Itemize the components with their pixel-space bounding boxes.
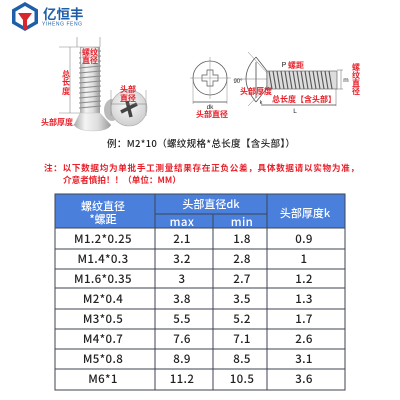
label: head diameter: 直径 (120, 93, 136, 104)
red notice: 注：以下数据均为单批手工测量结果存在正负公差，具体数据请以实物为准， (44, 162, 359, 174)
header: thread diameter and pitch (81, 198, 125, 227)
label: total length: 总 (62, 69, 70, 80)
dk dimension (193, 101, 227, 103)
row: M5 (83, 351, 313, 367)
icon: hexagon screw emblem (12, 2, 38, 31)
screw shaft with threads (79, 47, 101, 115)
header: head diameter dk: 头部直径dk (182, 196, 240, 212)
technical drawing: top view (190, 57, 231, 120)
table header background (55, 194, 345, 228)
row: M2: 1.3 (295, 291, 313, 307)
row: M1.2: 1.8 (233, 231, 251, 247)
row: M1.4: 1 (301, 251, 307, 267)
row: M5: M5*0.8 (83, 351, 123, 367)
header: thread diameter and pitch: 螺纹直径 (81, 198, 125, 214)
red notice (44, 162, 359, 186)
row: M1.6: 2.7 (233, 271, 251, 287)
example caption: 例：M2*10（螺纹规格*总长度【含头部】） (107, 136, 295, 150)
row: M3: 5.2 (233, 311, 251, 327)
screw head top view (104, 90, 147, 126)
row: M1.6: 1.2 (295, 271, 313, 287)
technical drawing: side view (233, 52, 360, 115)
row: M5: 8.9 (173, 351, 191, 367)
label: thread diameter: 直径 (82, 55, 98, 66)
threaded shaft (267, 71, 337, 89)
row: M6: 11.2 (170, 371, 194, 387)
screw head (74, 113, 111, 131)
L label: L (293, 108, 297, 115)
label: thread diameter vertical: 直 (352, 78, 360, 89)
row: M5: 8.5 (233, 351, 251, 367)
specification table (55, 194, 345, 390)
row: M3: 1.7 (295, 311, 313, 327)
row: M1.2: 0.9 (295, 231, 313, 247)
row: M4: M4*0.7 (83, 331, 123, 347)
label: head diameter: 头部 (120, 84, 136, 95)
row: M3: 5.5 (173, 311, 191, 327)
red notice: 介意者慎拍！！（单位：MM） (63, 174, 181, 186)
row: M3: M3*0.5 (83, 311, 123, 327)
row: M1.2: M1.2*0.25 (74, 231, 132, 247)
row: M4: 2.6 (295, 331, 313, 347)
90 degree label: 90° (233, 79, 243, 85)
photo: screw with dimension labels (41, 37, 147, 131)
label: thread diameter: 螺纹 (82, 47, 98, 58)
label: total length: 长 (62, 77, 70, 88)
row: M1.6 (74, 271, 313, 287)
label: head thickness: 头部厚度 (41, 117, 73, 128)
row: M1.2: 2.1 (173, 231, 191, 247)
head outline circle (193, 61, 227, 95)
cross recess (202, 70, 218, 86)
label: pitch: 螺距 (288, 60, 304, 71)
row: M6 (88, 371, 313, 387)
label: thread diameter vertical: 径 (352, 86, 360, 97)
centre lines (190, 57, 231, 104)
row: M1.4: 3.2 (173, 251, 191, 267)
row: M6: 10.5 (230, 371, 254, 387)
label: total length: 度 (62, 86, 70, 97)
row: M5: 3.1 (295, 351, 313, 367)
label: thread diameter vertical (352, 62, 360, 97)
dimension lines (59, 37, 100, 125)
row: M4: 7.1 (233, 331, 251, 347)
row: M2: M2*0.4 (83, 291, 123, 307)
m label: m (343, 77, 349, 84)
m dimension (336, 70, 343, 106)
label: head diameter (120, 84, 136, 104)
header: min: min (231, 214, 253, 230)
angle lines (235, 52, 268, 106)
label: thread diameter vertical: 纹 (352, 70, 360, 81)
label: head thickness: 头部厚度 (240, 86, 272, 97)
row: M3 (83, 311, 313, 327)
dk label: dk (207, 104, 214, 111)
row: M1.6: 3 (179, 271, 185, 287)
row: M1.4: M1.4*0.3 (78, 251, 128, 267)
row: M6: 3.6 (295, 371, 313, 387)
logo wordmark: 亿恒丰 (43, 3, 84, 23)
logo pinyin: YIHENG FENG (42, 22, 82, 28)
row: M1.4 (78, 251, 307, 267)
label: thread diameter vertical: 螺 (352, 62, 360, 73)
header: max: max (170, 214, 194, 230)
row: M1.6: M1.6*0.35 (74, 271, 132, 287)
row: M4: 7.6 (173, 331, 191, 347)
header: thread diameter and pitch: *螺距 (89, 211, 117, 227)
header: head thickness k: 头部厚度k (280, 205, 331, 221)
label: thread diameter (81, 47, 98, 66)
row: M1.4: 2.8 (233, 251, 251, 267)
P label: P (282, 62, 287, 69)
table grid (55, 194, 345, 390)
logo: Yiheng Feng (12, 2, 84, 31)
label: head diameter: 头部直径 (196, 109, 228, 120)
label: total length including head: 总长度【含头部】 (272, 94, 336, 105)
L dimension (261, 104, 336, 106)
row: M2: 3.8 (173, 291, 191, 307)
row: M6: M6*1 (88, 371, 118, 387)
row: M1.2 (74, 231, 313, 247)
row: M2 (83, 291, 313, 307)
row: M2: 3.5 (233, 291, 251, 307)
countersunk head (246, 57, 267, 102)
label: total length (62, 69, 70, 97)
row: M4 (83, 331, 313, 347)
k label: k (260, 100, 263, 106)
